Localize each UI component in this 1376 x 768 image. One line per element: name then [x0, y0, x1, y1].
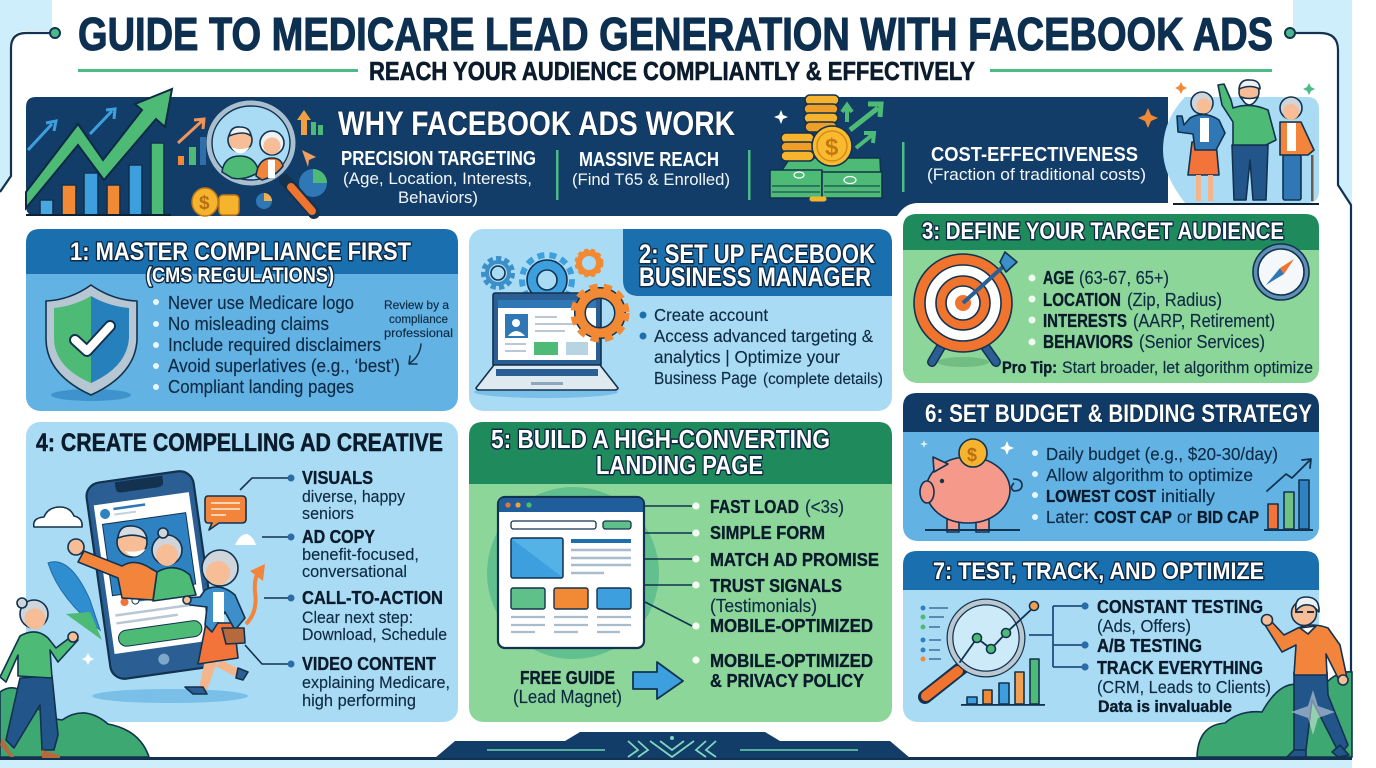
- budget list: [1032, 444, 1278, 527]
- icon: rising bar chart: [1264, 459, 1313, 531]
- testing list: TRACK EVERYTHING: [1097, 657, 1263, 678]
- text: precision targeting: PRECISION TARGETING: [341, 148, 536, 170]
- panel 3: define your target audience: [903, 214, 1319, 383]
- heading 5: [491, 424, 830, 480]
- targeting list: (Zip, Radius): [1127, 290, 1222, 310]
- ad creative list: diverse, happy: [302, 487, 405, 506]
- testing list: [1097, 596, 1271, 716]
- icon: three happy seniors: [1173, 80, 1319, 205]
- text: cost-effectiveness: (Fraction of traditional costs): [927, 165, 1146, 184]
- subtitle: REACH YOUR AUDIENCE COMPLIANTLY & EFFECTIVELY: [369, 56, 975, 86]
- budget list: BID CAP: [1197, 507, 1259, 527]
- compliance checklist: Avoid superlatives (e.g., ‘best’): [168, 356, 400, 376]
- landing page checklist: SIMPLE FORM: [710, 522, 825, 543]
- heading 1: 1: MASTER COMPLIANCE FIRST: [70, 238, 411, 266]
- heading: why Facebook ads work: WHY FACEBOOK ADS WORK: [338, 105, 735, 143]
- budget list: Daily budget (e.g., $20-30/day): [1046, 444, 1278, 464]
- heading 2: BUSINESS MANAGER: [639, 262, 871, 292]
- icon: money and coins: $: [825, 134, 839, 161]
- free guide lead magnet: (Lead Magnet): [513, 687, 622, 707]
- icon: speech bubble: [205, 496, 246, 530]
- compliance checklist: Compliant landing pages: [168, 377, 354, 397]
- illustration: phone with ad: [85, 469, 219, 681]
- landing page checklist: MOBILE-OPTIMIZED: [710, 615, 873, 636]
- text: precision targeting: [341, 148, 536, 207]
- text: cost-effectiveness: COST-EFFECTIVENESS: [931, 144, 1138, 166]
- illustration: landing page window: [487, 487, 659, 659]
- ad creative list: high performing: [302, 691, 416, 710]
- illustration: running senior woman: [183, 550, 265, 694]
- icon: compass: [1253, 244, 1309, 300]
- heading 7: 7: TEST, TRACK, AND OPTIMIZE: [933, 558, 1264, 585]
- setup bullet list: Create account: [654, 305, 768, 325]
- budget list: LOWEST COST: [1046, 486, 1156, 506]
- icon: sparkles: [1138, 82, 1315, 128]
- setup bullet list: Access advanced targeting &: [654, 326, 873, 346]
- setup bullet list: Business Page: [654, 368, 757, 388]
- heading 2: 2: SET UP FACEBOOK: [639, 239, 875, 269]
- landing page checklist: & PRIVACY POLICY: [710, 670, 865, 691]
- compliance checklist: Include required disclaimers: [168, 335, 381, 355]
- budget list: initially: [1161, 486, 1215, 506]
- icon: magnifier with seniors: $: [199, 193, 210, 214]
- ad creative list: VISUALS: [302, 468, 373, 488]
- testing list: (CRM, Leads to Clients): [1097, 677, 1271, 697]
- budget list: or: [1177, 507, 1192, 527]
- heading 2: [639, 239, 875, 292]
- setup bullet list: [640, 305, 883, 388]
- illustration: bush and senior man bottom right: [1197, 597, 1352, 757]
- connector lines: [240, 474, 294, 668]
- ad creative list: seniors: [302, 504, 354, 523]
- text: massive reach: [572, 149, 730, 189]
- bottom footer ornament: [435, 732, 910, 758]
- illustration: cloud and plants: [34, 507, 256, 703]
- budget list: Later:: [1046, 507, 1089, 527]
- icon: money and coins: [770, 95, 882, 199]
- targeting list: [1028, 268, 1275, 352]
- ad creative list: AD COPY: [302, 527, 375, 547]
- landing page checklist: TRUST SIGNALS: [710, 575, 842, 596]
- illustration: couple on phone screen: [68, 526, 196, 601]
- targeting list: (AARP, Retirement): [1133, 311, 1275, 331]
- ad creative list: Clear next step:: [302, 608, 413, 627]
- panel: why Facebook ads work banner: [26, 80, 1319, 216]
- targeting list: AGE: [1043, 268, 1074, 288]
- panel 5: build a high-converting landing page: [469, 422, 892, 722]
- compliance checklist: [153, 293, 400, 397]
- testing list: CONSTANT TESTING: [1097, 596, 1263, 617]
- landing page checklist: (<3s): [805, 496, 844, 517]
- icon: analytics magnifier: [920, 602, 1045, 706]
- heading 1: [70, 238, 411, 287]
- heading 5: LANDING PAGE: [596, 450, 763, 480]
- callout: review by professional: compliance: [389, 312, 448, 326]
- callout: review by professional: professional: [384, 326, 453, 340]
- connector bracket: [1029, 602, 1089, 671]
- heading 1: (CMS REGULATIONS): [146, 264, 334, 287]
- free guide lead magnet: [513, 667, 622, 707]
- targeting list: (63-67, 65+): [1079, 268, 1169, 288]
- panel 4: create compelling ad creative: [26, 422, 458, 722]
- connector lines: [645, 502, 700, 664]
- heading 5: 5: BUILD A HIGH-CONVERTING: [491, 424, 830, 454]
- compliance checklist: Never use Medicare logo: [168, 293, 354, 313]
- free guide lead magnet: FREE GUIDE: [520, 667, 615, 688]
- text: massive reach: MASSIVE REACH: [579, 149, 719, 171]
- ad creative list: [302, 468, 450, 710]
- text: precision targeting: (Age, Location, Interests,: [343, 169, 532, 188]
- budget list: COST CAP: [1094, 507, 1172, 527]
- landing page checklist: [710, 496, 879, 691]
- testing list: Data is invaluable: [1098, 698, 1232, 716]
- panel 1: master compliance first: [26, 229, 458, 411]
- targeting list: (Senior Services): [1139, 332, 1265, 352]
- icon: laptop with gears: [474, 250, 626, 398]
- icon: magnifier with seniors: [178, 103, 327, 216]
- ad creative list: Download, Schedule: [302, 625, 447, 644]
- pro tip: Pro Tip:: [1002, 359, 1057, 377]
- text: precision targeting: Behaviors): [398, 188, 478, 207]
- setup bullet list: analytics | Optimize your: [654, 347, 840, 367]
- targeting list: BEHAVIORS: [1043, 332, 1133, 352]
- ad creative list: explaining Medicare,: [302, 673, 450, 692]
- ad creative list: benefit-focused,: [302, 545, 419, 564]
- panel 6: set budget and bidding strategy: [903, 393, 1319, 541]
- landing page checklist: MOBILE-OPTIMIZED: [710, 650, 873, 671]
- testing list: (Ads, Offers): [1097, 616, 1191, 636]
- callout: review by professional: Review by a: [384, 298, 449, 312]
- ad creative list: conversational: [302, 562, 407, 581]
- text: cost-effectiveness: [927, 144, 1146, 184]
- heading 4: 4: CREATE COMPELLING AD CREATIVE: [36, 429, 443, 457]
- panel 7: test, track, and optimize: [903, 551, 1319, 722]
- setup bullet list: (complete details): [763, 371, 883, 388]
- arrow: lead magnet to form: [633, 662, 683, 699]
- targeting list: LOCATION: [1043, 290, 1121, 310]
- compliance checklist: No misleading claims: [168, 314, 329, 334]
- subtitle: [78, 56, 1272, 86]
- icon: compliance shield: [46, 285, 137, 401]
- landing page checklist: (Testimonials): [710, 596, 817, 616]
- testing list: A/B TESTING: [1097, 635, 1202, 656]
- icon: bullseye target with dart: [914, 252, 1017, 367]
- ad creative list: CALL-TO-ACTION: [302, 588, 443, 608]
- budget list: Allow algorithm to optimize: [1046, 465, 1253, 485]
- heading 3: 3: DEFINE YOUR TARGET AUDIENCE: [922, 218, 1284, 245]
- ad creative list: VIDEO CONTENT: [302, 654, 436, 674]
- illustration: bush and walking woman bottom left: [0, 598, 149, 758]
- icon: growth chart with arrow: [26, 89, 172, 216]
- panel 2: set up Facebook Business Manager: [469, 229, 892, 411]
- landing page checklist: MATCH AD PROMISE: [710, 549, 879, 570]
- pro tip: Start broader, let algorithm optimize: [1062, 359, 1313, 377]
- landing page checklist: FAST LOAD: [710, 496, 799, 517]
- icon: piggy bank: [920, 439, 1022, 532]
- callout: review by professional: [384, 298, 453, 364]
- targeting list: INTERESTS: [1043, 311, 1127, 331]
- icon: piggy bank: $: [967, 445, 977, 465]
- text: massive reach: (Find T65 & Enrolled): [572, 170, 730, 189]
